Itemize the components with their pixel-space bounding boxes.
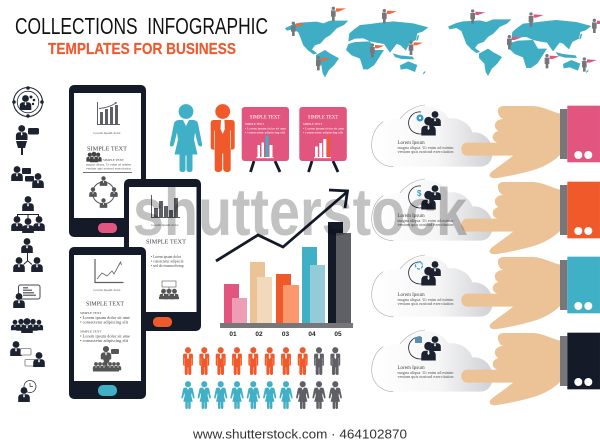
phone 2: Lorem Ipsum dolor	[151, 223, 179, 227]
mini bar chart	[256, 136, 274, 158]
phone 3: • consectetur adipiscing elit	[80, 320, 128, 324]
phone 3: Lorem Ipsum dolor	[93, 288, 121, 292]
phone 3: • Lorem ipsum dolor sit ame	[80, 334, 130, 338]
mini bar chart	[314, 136, 331, 158]
cloud row 4: magna aliqua. Ut enim ad minim	[398, 371, 454, 375]
hand and sleeve	[461, 182, 600, 254]
icon: speaker and audience	[93, 346, 121, 372]
cloud row 1: veniam quis nostrud exercitation	[398, 150, 454, 154]
phone 2: • sed do eiusmod temp	[151, 264, 184, 268]
phone 2: SIMPLE TEXT	[146, 238, 186, 246]
phone 1: SIMPLE TEXT	[87, 146, 127, 152]
presentation board 2	[299, 107, 347, 172]
icon: equalizer chart	[151, 195, 180, 218]
presentation board 2: • Lorem ipsum dolor sit ame	[303, 126, 345, 130]
axis labels: 03	[282, 331, 289, 338]
figure: woman	[170, 104, 202, 172]
phone 3: • Lorem ipsum dolor sit ame	[80, 316, 130, 320]
icon: bar chart	[97, 102, 120, 125]
presentation board 1	[242, 107, 289, 172]
cloud row 4	[372, 330, 600, 405]
icon: speaker at podium	[16, 125, 39, 155]
axis labels: 02	[255, 331, 263, 338]
figure: man	[211, 104, 235, 172]
bar chart	[220, 222, 353, 338]
icon column	[10, 86, 45, 402]
axis labels: 04	[308, 331, 316, 338]
icon: two people with text boxes	[10, 341, 45, 367]
cloud row 4: veniam quis nostrud exercitation	[398, 375, 454, 379]
presentation board 1: • Lorem ipsum dolor sit ame	[245, 126, 287, 130]
icon: person with clock	[18, 380, 36, 402]
icon: two people talking	[11, 166, 44, 188]
phone 3: SIMPLE TEXT	[80, 311, 102, 315]
phone 1: veniam quis nostrud exercitation	[86, 166, 131, 170]
phone 3: SIMPLE TEXT	[80, 330, 102, 334]
icon: hierarchy	[11, 196, 45, 233]
icon: target with people	[12, 86, 44, 118]
icon: network of three	[13, 238, 43, 272]
cloud row 3: Lorem Ipsum	[398, 293, 425, 298]
cloud row 3: magna aliqua. Ut enim ad minim	[398, 298, 454, 302]
presentation board 2: SIMPLE TEXT	[308, 116, 338, 120]
icon: people with dollar	[409, 185, 441, 210]
world map: pink flags	[448, 9, 600, 76]
icon: line chart	[95, 259, 124, 282]
icon: presenter with chart board	[13, 285, 40, 308]
icon: people with chart	[409, 336, 441, 360]
phone 1: SIMPLE TEXT	[103, 158, 124, 162]
icon: people with gear	[409, 111, 441, 136]
phone 3	[69, 247, 146, 399]
cloud row 3: veniam quis nostrud exercitation	[398, 302, 454, 306]
cloud row 1: Lorem Ipsum	[398, 141, 425, 146]
cloud row 2: Lorem Ipsum	[398, 214, 425, 219]
cloud row 4: Lorem Ipsum	[398, 366, 425, 371]
presentation board 2: • consectetur adipiscing elit	[303, 130, 343, 134]
footer url: www.shutterstock.com · 464102870	[192, 426, 407, 442]
cloud row 1	[372, 105, 600, 178]
hand and sleeve	[461, 106, 600, 178]
phone 1: magna aliqua. Ut enim ad minim	[86, 162, 131, 166]
cloud row 3	[372, 255, 600, 329]
title: COLLECTIONS INFOGRAPHIC	[15, 13, 268, 39]
hand and sleeve	[461, 333, 600, 405]
icon: crowd	[11, 318, 43, 333]
phone 3: SIMPLE TEXT	[86, 302, 124, 308]
icon: people with dollar: $	[417, 189, 422, 198]
icon: people with globe	[409, 261, 441, 286]
hand and sleeve	[461, 257, 600, 329]
phone 2: • Lorem ipsum dolor	[151, 255, 182, 259]
phone 1	[69, 85, 146, 237]
phone 2	[124, 179, 201, 331]
presentation board 1: SIMPLE TEXT	[245, 122, 264, 126]
people rows: men	[183, 347, 340, 375]
cloud row 2: veniam quis nostrud exercitation	[398, 223, 454, 227]
cloud row 2: magna aliqua. Ut enim ad minim	[398, 219, 454, 223]
phone 2: • consectetur adipiscin	[151, 260, 184, 264]
presentation board 1: • consectetur adipiscing elit	[245, 130, 285, 134]
subtitle: TEMPLATES FOR BUSINESS	[48, 41, 236, 58]
axis labels: 05	[334, 331, 342, 338]
cloud row 1: magna aliqua. Ut enim ad minim	[398, 146, 454, 150]
axis labels	[229, 331, 342, 338]
presentation board 1: SIMPLE TEXT	[250, 116, 280, 120]
watermark: shutterstock	[133, 175, 468, 250]
arrow: growth trend	[216, 190, 348, 261]
icon: team with board	[159, 281, 179, 299]
people rows: women	[181, 381, 342, 409]
presentation board 2: SIMPLE TEXT	[303, 122, 322, 126]
cloud row 2	[372, 179, 600, 254]
phone 1: Lorem Ipsum dolor	[93, 131, 121, 135]
world map: orange flags	[285, 7, 428, 77]
icon: group	[86, 152, 102, 162]
phone 3: • consectetur adipiscing elit	[80, 339, 128, 343]
icon: circle of people	[89, 176, 118, 208]
axis labels: 01	[229, 331, 237, 338]
